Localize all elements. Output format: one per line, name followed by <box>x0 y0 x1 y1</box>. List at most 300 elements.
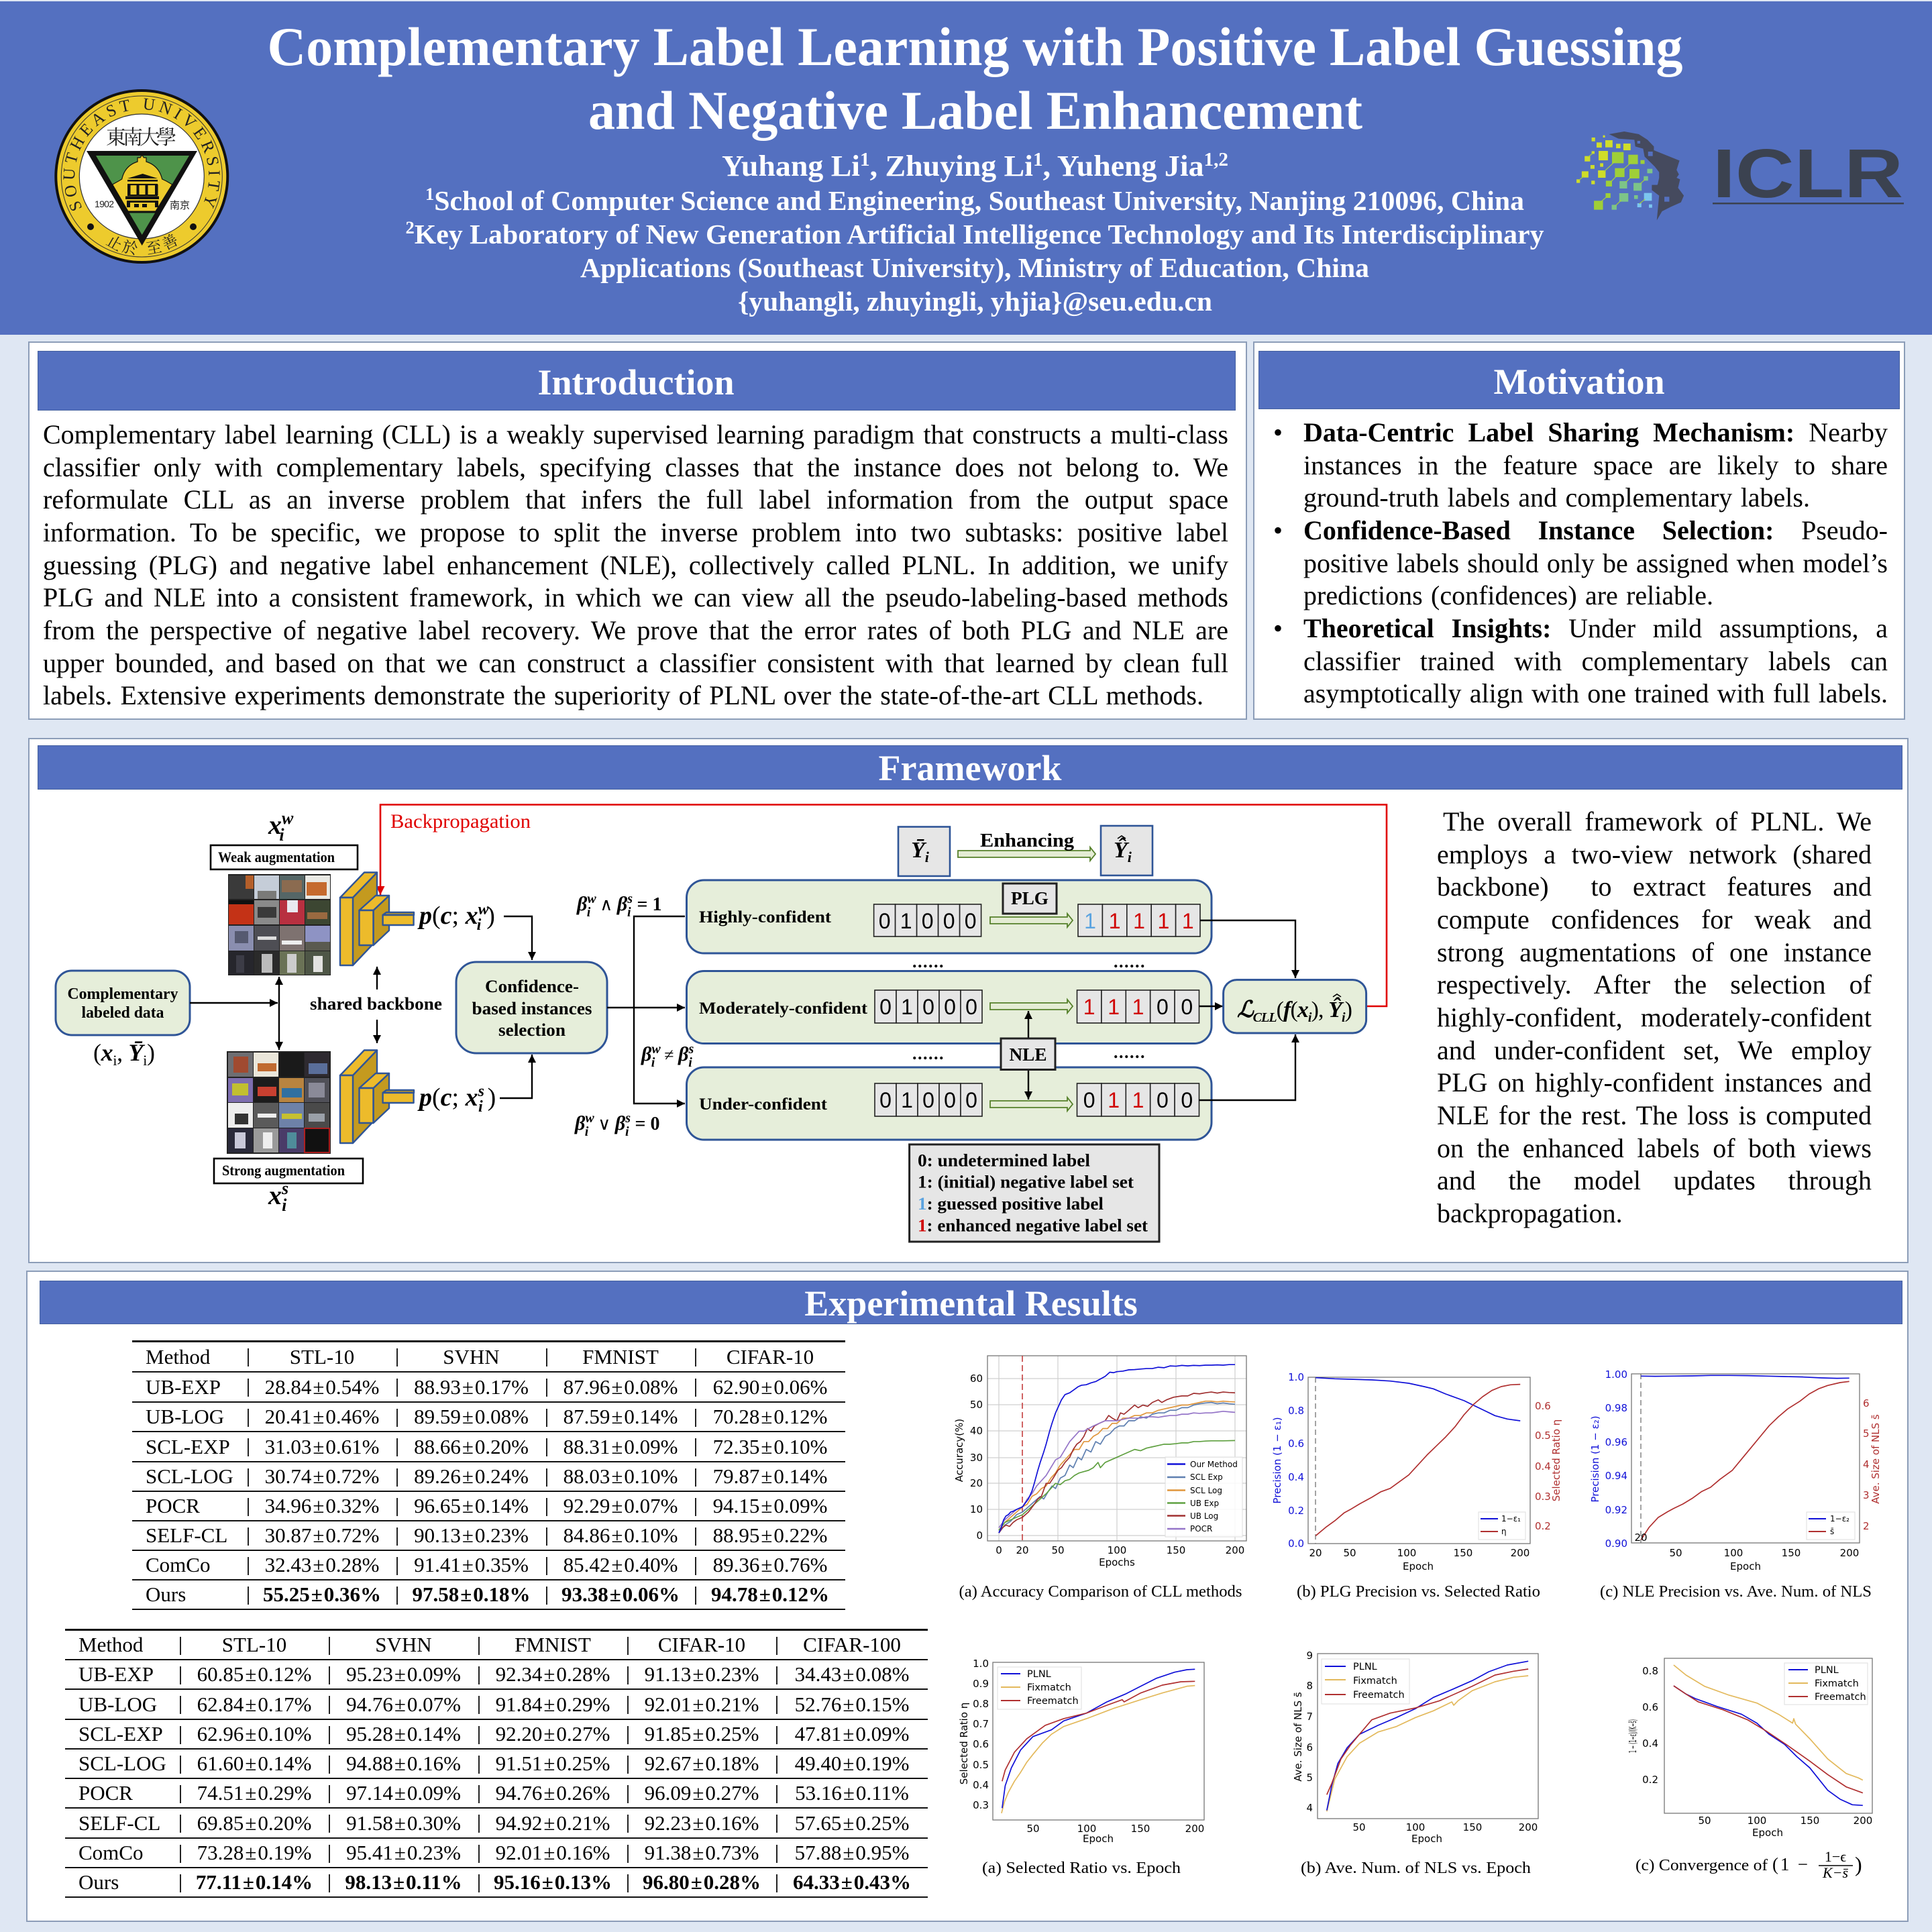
chart: PLG precision vs selected ratio: 0.4 <box>1288 1471 1304 1483</box>
chart: NLE precision vs average number of NLS: 2 <box>1863 1520 1870 1532</box>
table: accuracy comparison, bottom: 92.20±0.27% <box>496 1722 610 1746</box>
chart: average number of NLS vs epoch: 7 <box>1306 1711 1313 1723</box>
chart: PLG precision vs selected ratio: 0.3 <box>1535 1491 1551 1503</box>
row: highly-confident <box>687 880 1212 953</box>
table: accuracy comparison, top: SCL-LOG <box>146 1464 233 1488</box>
chart: selected ratio vs epoch: 50 <box>1026 1823 1040 1835</box>
caption: chart c bottom: (1 − <box>1772 1854 1808 1874</box>
legend key: complementary to enhanced label: Ŷ <box>1114 838 1128 863</box>
row: under-confident: 0 <box>1083 1088 1095 1112</box>
legend key: complementary to enhanced label: Enhancing <box>980 830 1074 851</box>
math: weak view: w <box>282 808 294 828</box>
table: accuracy comparison, bottom: 52.76±0.15% <box>795 1692 909 1716</box>
panel: introduction <box>28 341 1247 720</box>
row: under-confident: 0 <box>1181 1088 1193 1112</box>
math: selection conditions: β <box>678 1043 688 1065</box>
logo: Southeast University seal: SOUTHEAST UNIVERSITY <box>63 98 220 211</box>
table: accuracy comparison, top: 96.65±0.14% <box>414 1494 529 1517</box>
chart: average number of NLS vs epoch: Freematch <box>1353 1690 1405 1701</box>
chart: selected ratio vs epoch: 1.0 <box>973 1658 989 1670</box>
row: moderately-confident: 0 <box>944 995 956 1019</box>
row: moderately-confident: 1 <box>1083 995 1095 1019</box>
chart: average number of NLS vs epoch: 6 <box>1306 1741 1313 1754</box>
chart: accuracy comparison of CLL methods: Epochs <box>1099 1556 1135 1568</box>
chart: convergence: PLNL <box>1815 1665 1839 1676</box>
chart: PLG precision vs selected ratio: 0.6 <box>1288 1438 1304 1450</box>
arrow: weak prediction to selection <box>504 916 532 960</box>
node: complementary labeled data: Complementary <box>67 985 178 1003</box>
caption: chart a top: (a) Accuracy Comparison of CLL methods <box>959 1583 1242 1601</box>
node: confidence-based instances selection <box>456 962 607 1053</box>
math: selection conditions: ≠ <box>664 1045 678 1065</box>
chart: accuracy comparison of CLL methods: 200 <box>1226 1544 1244 1556</box>
chart: average number of NLS vs epoch: 8 <box>1306 1680 1313 1692</box>
chart: PLG precision vs selected ratio: η <box>1501 1527 1507 1536</box>
chart: NLE precision vs average number of NLS: 4 <box>1863 1458 1870 1470</box>
chart: average number of NLS vs epoch: 200 <box>1519 1821 1538 1833</box>
node: confidence-based instances selection: Confidence- <box>485 977 579 996</box>
table: accuracy comparison, bottom: 53.16±0.11% <box>795 1781 909 1805</box>
table: accuracy comparison, top: 72.35±0.10% <box>713 1434 827 1458</box>
table: accuracy comparison, top: 70.28±0.12% <box>713 1405 827 1428</box>
row: highly-confident: 1 <box>1133 909 1145 933</box>
heading: Introduction: Introduction <box>537 362 735 402</box>
bullet list: motivation points <box>1273 417 1888 708</box>
legend: label meanings: 0: undetermined label <box>918 1151 1090 1170</box>
chart: selected ratio vs epoch: Freematch <box>1027 1696 1079 1707</box>
row: moderately-confident: 1 <box>901 995 913 1019</box>
table: accuracy comparison, bottom: 94.92±0.21% <box>496 1811 610 1834</box>
table: accuracy comparison, top: 30.87±0.72% <box>265 1523 379 1547</box>
legend key: complementary to enhanced label: Ȳ <box>911 838 925 863</box>
table: accuracy comparison, top: 94.78±0.12% <box>711 1582 829 1606</box>
math: selection conditions <box>574 892 694 1139</box>
text block: introduction paragraph: PLG and NLE into a consistent framework, in which we can view all the pseudo-labeling-based methods <box>43 582 1228 612</box>
table: accuracy comparison, bottom: FMNIST <box>515 1633 591 1656</box>
node: complementary labeled data: labeled data <box>82 1004 164 1022</box>
caption: chart b top: (b) PLG Precision vs. Selected Ratio <box>1297 1583 1540 1601</box>
node: CLL loss <box>1224 980 1366 1033</box>
table: accuracy comparison, bottom: 91.58±0.30% <box>346 1811 461 1834</box>
node: confidence-based instances selection: based instances <box>472 999 592 1018</box>
math: strong prediction: ) <box>488 1083 496 1112</box>
chart: NLE precision vs average number of NLS: 0.90 <box>1605 1538 1627 1550</box>
math: selection conditions: = 1 <box>637 894 662 915</box>
math: strong prediction: s <box>478 1083 484 1100</box>
table: accuracy comparison, top: 88.03±0.10% <box>564 1464 678 1488</box>
table: accuracy comparison, bottom: SELF-CL <box>78 1811 160 1834</box>
table: accuracy comparison, bottom: 73.28±0.19% <box>197 1841 311 1864</box>
logo: Southeast University seal: 至 <box>144 234 164 259</box>
chart: accuracy comparison of CLL methods: 50 <box>970 1399 983 1411</box>
node: CLL loss: i <box>1308 1010 1312 1025</box>
chart: average number of NLS vs epoch: Epoch <box>1411 1833 1442 1845</box>
chart: NLE precision vs average number of NLS: 20 <box>1634 1532 1648 1544</box>
table: accuracy comparison, top: 28.84±0.54% <box>265 1375 379 1398</box>
bullet list: motivation points: predictions (confidences) are reliable. <box>1303 580 1713 610</box>
math: selection conditions: i <box>625 1124 629 1139</box>
table: accuracy comparison, bottom: SCL-LOG <box>78 1752 166 1775</box>
table: accuracy comparison, bottom: 77.11±0.14% <box>196 1870 313 1894</box>
row: under-confident: 0 <box>1157 1088 1169 1112</box>
table: accuracy comparison, bottom: POCR <box>78 1781 133 1805</box>
arrows: data to augmentations <box>190 977 279 1050</box>
row: highly-confident: 0 <box>879 909 890 933</box>
row: under-confident: 0 <box>922 1088 934 1112</box>
chart: convergence: Fixmatch <box>1815 1678 1859 1689</box>
table: accuracy comparison, bottom: UB-LOG <box>78 1692 157 1716</box>
math: selection conditions: w <box>651 1042 661 1057</box>
chart: selected ratio vs epoch: 150 <box>1131 1823 1150 1835</box>
chart: NLE precision vs average number of NLS: s̄ <box>1830 1527 1834 1536</box>
table: accuracy comparison, top: 90.13±0.23% <box>414 1523 529 1547</box>
logo: Southeast University seal: 南京 <box>170 198 190 212</box>
image grid: strongly augmented samples <box>227 1051 331 1154</box>
chart: PLG precision vs selected ratio <box>1271 1371 1562 1572</box>
table: accuracy comparison, bottom: Ours <box>78 1870 119 1894</box>
row: moderately-confident <box>687 971 1212 1044</box>
authors and affiliations: , Zhuying Li <box>870 150 1033 182</box>
logo: Southeast University seal: 1902 <box>95 199 114 209</box>
chart: NLE precision vs average number of NLS: 50 <box>1669 1547 1682 1559</box>
table: accuracy comparison, top: 84.86±0.10% <box>564 1523 678 1547</box>
math: input pair: i <box>143 1052 147 1069</box>
title <box>267 16 1682 141</box>
label: Backpropagation: Backpropagation <box>390 810 531 833</box>
table: accuracy comparison, top: 30.74±0.72% <box>265 1464 379 1488</box>
chart: selected ratio vs epoch: 100 <box>1077 1823 1096 1835</box>
table: accuracy comparison, bottom: SVHN <box>375 1633 432 1656</box>
row: under-confident: 1 <box>1132 1088 1144 1112</box>
math: input pair: i <box>113 1052 117 1069</box>
caption: chart a bottom: (a) Selected Ratio vs. Epoch <box>982 1860 1181 1877</box>
chart: convergence: 0.6 <box>1642 1701 1658 1713</box>
chart: selected ratio vs epoch: Epoch <box>1083 1833 1114 1845</box>
chart: NLE precision vs average number of NLS: Precision (1 − ε₂) <box>1589 1415 1601 1503</box>
table: accuracy comparison, bottom: 94.88±0.16% <box>346 1752 461 1775</box>
table: accuracy comparison, bottom: 91.84±0.29% <box>496 1692 610 1716</box>
table: accuracy comparison, bottom: 69.85±0.20% <box>197 1811 311 1834</box>
table: accuracy comparison, bottom: 97.14±0.09% <box>346 1781 461 1805</box>
math: weak prediction: w <box>478 901 490 918</box>
node: CLL loss: ) <box>1345 998 1352 1022</box>
table: accuracy comparison, bottom: 94.76±0.26% <box>496 1781 610 1805</box>
chart: selected ratio vs epoch: 0.9 <box>973 1678 989 1690</box>
math: selection conditions: = 0 <box>635 1114 660 1134</box>
text block: framework description: respectively. After the selection of <box>1437 969 1872 1000</box>
table: accuracy comparison, top: 31.03±0.61% <box>265 1434 379 1458</box>
authors and affiliations: 1 <box>425 184 434 204</box>
text block: framework description: and the model updates through <box>1437 1165 1872 1195</box>
math: input pair: (x <box>93 1039 113 1066</box>
chart: PLG precision vs selected ratio: 0.2 <box>1535 1520 1551 1532</box>
math: selection conditions: i <box>651 1055 655 1070</box>
text block: framework description: PLG on highly-confident instances and <box>1437 1067 1872 1097</box>
heading: Introduction <box>38 351 1236 411</box>
authors and affiliations: 1 <box>1033 150 1043 170</box>
math: selection conditions: ∧ <box>600 895 617 914</box>
node: complementary labeled data <box>56 971 190 1035</box>
table: accuracy comparison, bottom: 62.84±0.17% <box>197 1692 311 1716</box>
ellipsis dots between rows: ...... <box>912 952 945 971</box>
row: moderately-confident: 0 <box>1181 995 1193 1019</box>
text block: framework description: The overall framework of PLNL. We <box>1443 806 1872 837</box>
math: selection conditions: β <box>577 893 587 915</box>
chart: accuracy comparison of CLL methods: 100 <box>1108 1544 1126 1556</box>
bullet list: motivation points: Confidence-Based Instance Selection: Pseudo- <box>1303 515 1888 545</box>
label: strong augmentation <box>214 1159 363 1183</box>
label: weak augmentation: Weak augmentation <box>218 849 335 865</box>
table: accuracy comparison, top: 55.25±0.36% <box>263 1582 381 1606</box>
chart: average number of NLS vs epoch <box>1292 1650 1538 1845</box>
row: highly-confident: Highly-confident <box>699 908 832 926</box>
table: accuracy comparison, bottom: UB-EXP <box>78 1662 154 1686</box>
header banner <box>0 1 1932 335</box>
chart: selected ratio vs epoch <box>958 1658 1204 1845</box>
chart: average number of NLS vs epoch: 4 <box>1306 1802 1313 1814</box>
table: accuracy comparison, top: STL-10 <box>290 1344 354 1368</box>
table: accuracy comparison, bottom: 91.85±0.25% <box>645 1722 759 1746</box>
table: accuracy comparison, top: 93.38±0.06% <box>561 1582 680 1606</box>
table: accuracy comparison, bottom: 57.88±0.95% <box>795 1841 909 1864</box>
table: accuracy comparison, top: 87.59±0.14% <box>564 1405 678 1428</box>
chart: accuracy comparison of CLL methods: UB Log <box>1190 1511 1218 1521</box>
chart: convergence: Freematch <box>1815 1692 1866 1703</box>
chart: NLE precision vs average number of NLS: 100 <box>1724 1547 1743 1559</box>
table: accuracy comparison, top: 88.95±0.22% <box>713 1523 827 1547</box>
table: accuracy comparison, top: POCR <box>146 1494 200 1517</box>
math: selection conditions: β <box>617 893 627 915</box>
table: accuracy comparison, top: 92.29±0.07% <box>564 1494 678 1517</box>
math: selection conditions: ∨ <box>598 1114 615 1134</box>
table: accuracy comparison, top: 79.87±0.14% <box>713 1464 827 1488</box>
math: input pair: ) <box>147 1039 155 1066</box>
chart: convergence: 200 <box>1854 1815 1872 1827</box>
table: accuracy comparison, bottom: CIFAR-10 <box>658 1633 745 1656</box>
chart: accuracy comparison of CLL methods: 10 <box>970 1503 983 1515</box>
chart: accuracy comparison of CLL methods: Accuracy(%) <box>953 1419 965 1482</box>
chart: PLG precision vs selected ratio: 0.5 <box>1535 1430 1551 1442</box>
text block: framework description: strong augmentations of one instance <box>1437 937 1872 967</box>
chart: NLE precision vs average number of NLS: 1.00 <box>1605 1368 1627 1381</box>
chart: accuracy comparison of CLL methods: 40 <box>970 1425 983 1437</box>
table: accuracy comparison, top: SVHN <box>443 1344 500 1368</box>
math: strong view: s <box>281 1179 288 1198</box>
table: accuracy comparison, bottom: 47.81±0.09% <box>795 1722 909 1746</box>
math: selection conditions: i <box>587 905 591 920</box>
chart: PLG precision vs selected ratio: Selected Ratio η <box>1550 1419 1562 1501</box>
bullet list: motivation points: • <box>1273 515 1283 545</box>
text block: framework description: highly-confident, moderately-confident <box>1437 1002 1872 1032</box>
math: selection conditions: s <box>627 892 633 906</box>
chart: PLG precision vs selected ratio: 1−ε₁ <box>1501 1514 1521 1523</box>
heading: Experimental Results: Experimental Results <box>804 1283 1138 1324</box>
legend key: complementary to enhanced label: i <box>925 849 930 865</box>
caption: chart c bottom: K−s̄ <box>1822 1864 1849 1881</box>
bullet list: motivation points: ground-truth labels and complementary labels. <box>1303 482 1810 513</box>
math: strong view: i <box>282 1195 287 1215</box>
chart: selected ratio vs epoch: PLNL <box>1027 1669 1051 1680</box>
row: highly-confident: 0 <box>922 909 933 933</box>
label: shared backbone: shared backbone <box>310 994 442 1014</box>
authors and affiliations: 1 <box>860 150 870 170</box>
row: under-confident: 0 <box>965 1088 977 1112</box>
table: accuracy comparison, top: UB-EXP <box>146 1375 221 1398</box>
charts: results figures <box>953 1355 1882 1881</box>
arrow: strong prediction to selection <box>500 1055 532 1098</box>
chart: accuracy comparison of CLL methods: 50 <box>1051 1544 1065 1556</box>
backbone: strong network <box>340 1051 414 1143</box>
table: accuracy comparison, top: 85.42±0.40% <box>564 1553 678 1576</box>
table: accuracy comparison, bottom: 57.65±0.25% <box>795 1811 909 1834</box>
chart: selected ratio vs epoch: 0.4 <box>973 1779 989 1791</box>
authors and affiliations: Applications (Southeast University), Ministry of Education, China <box>580 252 1369 283</box>
text block: introduction paragraph: Complementary label learning (CLL) is a weakly supervised learning paradigm that constructs a multi-class <box>43 419 1228 449</box>
logo: Southeast University seal: 於 <box>120 234 140 259</box>
heading: Experimental Results <box>40 1281 1902 1324</box>
table: accuracy comparison, top: 20.41±0.46% <box>265 1405 379 1428</box>
logo: Southeast University seal: 東南大學 <box>106 121 176 150</box>
table: accuracy comparison, top: SELF-CL <box>146 1523 227 1547</box>
row: moderately-confident: 0 <box>879 995 892 1019</box>
arrows: enhanced labels to loss <box>1199 920 1295 1100</box>
bullet list: motivation points: Data-Centric Label Sharing Mechanism: Nearby <box>1303 417 1888 447</box>
text block: framework description: and under-confident set, We employ <box>1437 1035 1872 1065</box>
table: accuracy comparison, top: 34.96±0.32% <box>265 1494 379 1517</box>
table: accuracy comparison, bottom: 92.67±0.18% <box>645 1752 759 1775</box>
node: CLL loss: i <box>1342 1010 1346 1025</box>
row: moderately-confident: 0 <box>922 995 934 1019</box>
table: accuracy comparison, top: ComCo <box>146 1553 210 1576</box>
chart: convergence: 150 <box>1801 1815 1819 1827</box>
table: accuracy comparison, bottom: 98.13±0.11% <box>345 1870 462 1894</box>
row: highly-confident: 1 <box>1182 909 1194 933</box>
chart: PLG precision vs selected ratio: 0.4 <box>1535 1460 1551 1472</box>
title: and Negative Label Enhancement <box>588 80 1362 141</box>
ellipsis dots between rows: ...... <box>1114 952 1146 971</box>
authors and affiliations: Key Laboratory of New Generation Artificial Intelligence Technology and Its Interdisciplinary <box>415 219 1544 250</box>
chart: accuracy comparison of CLL methods: 30 <box>970 1452 983 1464</box>
math: selection conditions: w <box>585 1111 594 1126</box>
table: accuracy comparison, top: 62.90±0.06% <box>713 1375 827 1398</box>
chart: average number of NLS vs epoch: 50 <box>1352 1821 1366 1833</box>
authors and affiliations <box>405 150 1544 317</box>
math: weak view: i <box>279 825 284 845</box>
chart: convergence: 0.8 <box>1642 1665 1658 1677</box>
chart: PLG precision vs selected ratio: 200 <box>1511 1547 1529 1559</box>
caption: chart c top: (c) NLE Precision vs. Ave. Num. of NLS <box>1600 1583 1872 1601</box>
text block: introduction paragraph: classifier only with complementary labels, specifying classes that the instance does not belong to. We <box>43 452 1228 482</box>
chart: selected ratio vs epoch: 0.5 <box>973 1759 989 1771</box>
chart: selected ratio vs epoch: Fixmatch <box>1027 1682 1071 1693</box>
chart: NLE precision vs average number of NLS: 0.96 <box>1605 1436 1627 1448</box>
chart: NLE precision vs average number of NLS: Epoch <box>1730 1560 1761 1572</box>
backbone: weak network <box>340 872 414 965</box>
caption: chart b bottom: (b) Ave. Num. of NLS vs. Epoch <box>1301 1860 1531 1877</box>
chart: convergence: 0.4 <box>1642 1737 1658 1750</box>
chart: average number of NLS vs epoch: 100 <box>1406 1821 1425 1833</box>
box: PLG: PLG <box>1011 888 1049 908</box>
chart: accuracy comparison of CLL methods: 20 <box>1016 1544 1029 1556</box>
label: strong augmentation: Strong augmentation <box>222 1162 345 1179</box>
legend: label meanings: 1: (initial) negative label set <box>918 1173 1134 1192</box>
node: confidence-based instances selection: selection <box>498 1020 566 1040</box>
text block: introduction paragraph: from the perspective of negative label recovery. We prove that the error rates of both PLG and NLE are <box>43 615 1228 645</box>
diagram: PLNL framework <box>55 804 1387 1242</box>
table: accuracy comparison, top: Ours <box>146 1582 186 1606</box>
chart: PLG precision vs selected ratio: Epoch <box>1403 1560 1434 1572</box>
row: highly-confident: 0 <box>965 909 976 933</box>
node: CLL loss: ℒ <box>1237 998 1253 1022</box>
image grid: weakly augmented samples <box>228 874 331 975</box>
chart: NLE precision vs average number of NLS: Ave. Size of NLS s̄ <box>1870 1414 1882 1504</box>
chart: selected ratio vs epoch: 0.6 <box>973 1738 989 1750</box>
table: accuracy comparison, top: 32.43±0.28% <box>265 1553 379 1576</box>
caption: chart c bottom: 1−ϵ <box>1825 1848 1846 1865</box>
chart: PLG precision vs selected ratio: 50 <box>1343 1547 1356 1559</box>
table: accuracy comparison, bottom <box>65 1629 928 1898</box>
table: accuracy comparison, top: 88.93±0.17% <box>414 1375 529 1398</box>
table: accuracy comparison, bottom: 92.34±0.28% <box>496 1662 610 1686</box>
chart: PLG precision vs selected ratio: 150 <box>1454 1547 1472 1559</box>
chart: NLE precision vs average number of NLS: 0.98 <box>1605 1402 1627 1414</box>
logo: ICLR: ICLR <box>1713 135 1903 212</box>
table: accuracy comparison, top: 89.26±0.24% <box>414 1464 529 1488</box>
text block: framework description: backpropagation. <box>1437 1198 1623 1228</box>
math: input pair: Ȳ <box>129 1039 144 1066</box>
bullet list: motivation points: classifier trained with complementary labels can <box>1303 646 1888 676</box>
table: accuracy comparison, bottom: STL-10 <box>222 1633 286 1656</box>
math: weak prediction: p(c; x <box>419 902 478 930</box>
table: accuracy comparison, bottom: 96.80±0.28% <box>643 1870 761 1894</box>
table: accuracy comparison, bottom: 91.38±0.73% <box>645 1841 759 1864</box>
table: accuracy comparison, bottom: 60.85±0.12% <box>197 1662 311 1686</box>
row: highly-confident: 0 <box>943 909 955 933</box>
authors and affiliations: School of Computer Science and Engineering, Southeast University, Nanjing 210096, China <box>434 185 1524 216</box>
math: selection conditions: i <box>627 905 631 920</box>
chart: NLE precision vs average number of NLS: 200 <box>1840 1547 1859 1559</box>
math: selection conditions: i <box>688 1055 692 1070</box>
row: under-confident: Under-confident <box>699 1095 828 1114</box>
chart: convergence: 100 <box>1748 1815 1766 1827</box>
chart: accuracy comparison of CLL methods <box>953 1356 1246 1568</box>
chart: PLG precision vs selected ratio: 0.2 <box>1288 1505 1304 1517</box>
text block: framework description: employs a two-view network (shared <box>1437 839 1872 869</box>
arrow: backpropagation feedback <box>380 805 1387 1006</box>
text block: introduction paragraph: labels. Extensive experiments demonstrate the superiority of PLNL over the state-of-the-art CLL methods. <box>43 680 1203 710</box>
math: selection conditions: i <box>585 1124 589 1139</box>
table: accuracy comparison, bottom: 94.76±0.07% <box>346 1692 461 1716</box>
text block: introduction paragraph: information. To be specific, we propose to split the inverse problem into two subtasks: positive label <box>43 517 1228 547</box>
table: accuracy comparison, bottom: 34.43±0.08% <box>795 1662 909 1686</box>
chart: selected ratio vs epoch: 0.8 <box>973 1698 989 1710</box>
text block: framework description: NLE for the rest. The loss is computed <box>1437 1100 1872 1130</box>
row: moderately-confident: 1 <box>1108 995 1120 1019</box>
arrows: NLE to moderately- and under-confident <box>1028 1011 1029 1099</box>
table: accuracy comparison, top: 94.15±0.09% <box>713 1494 827 1517</box>
legend: label meanings <box>910 1144 1159 1242</box>
chart: convergence: Epoch <box>1752 1827 1783 1839</box>
node: CLL loss: ), <box>1311 998 1324 1022</box>
chart: PLG precision vs selected ratio: 0.6 <box>1535 1400 1551 1412</box>
ellipsis dots between rows: ...... <box>912 1044 945 1063</box>
table: accuracy comparison, top: 87.96±0.08% <box>564 1375 678 1398</box>
bullet list: motivation points: instances in the feature space are likely to share <box>1303 450 1888 480</box>
math: selection conditions: β <box>575 1112 585 1134</box>
table: accuracy comparison, top: 88.31±0.09% <box>564 1434 678 1458</box>
bullet list: motivation points: Theoretical Insights: Under mild assumptions, a <box>1303 613 1888 643</box>
math: selection conditions: β <box>641 1043 651 1065</box>
